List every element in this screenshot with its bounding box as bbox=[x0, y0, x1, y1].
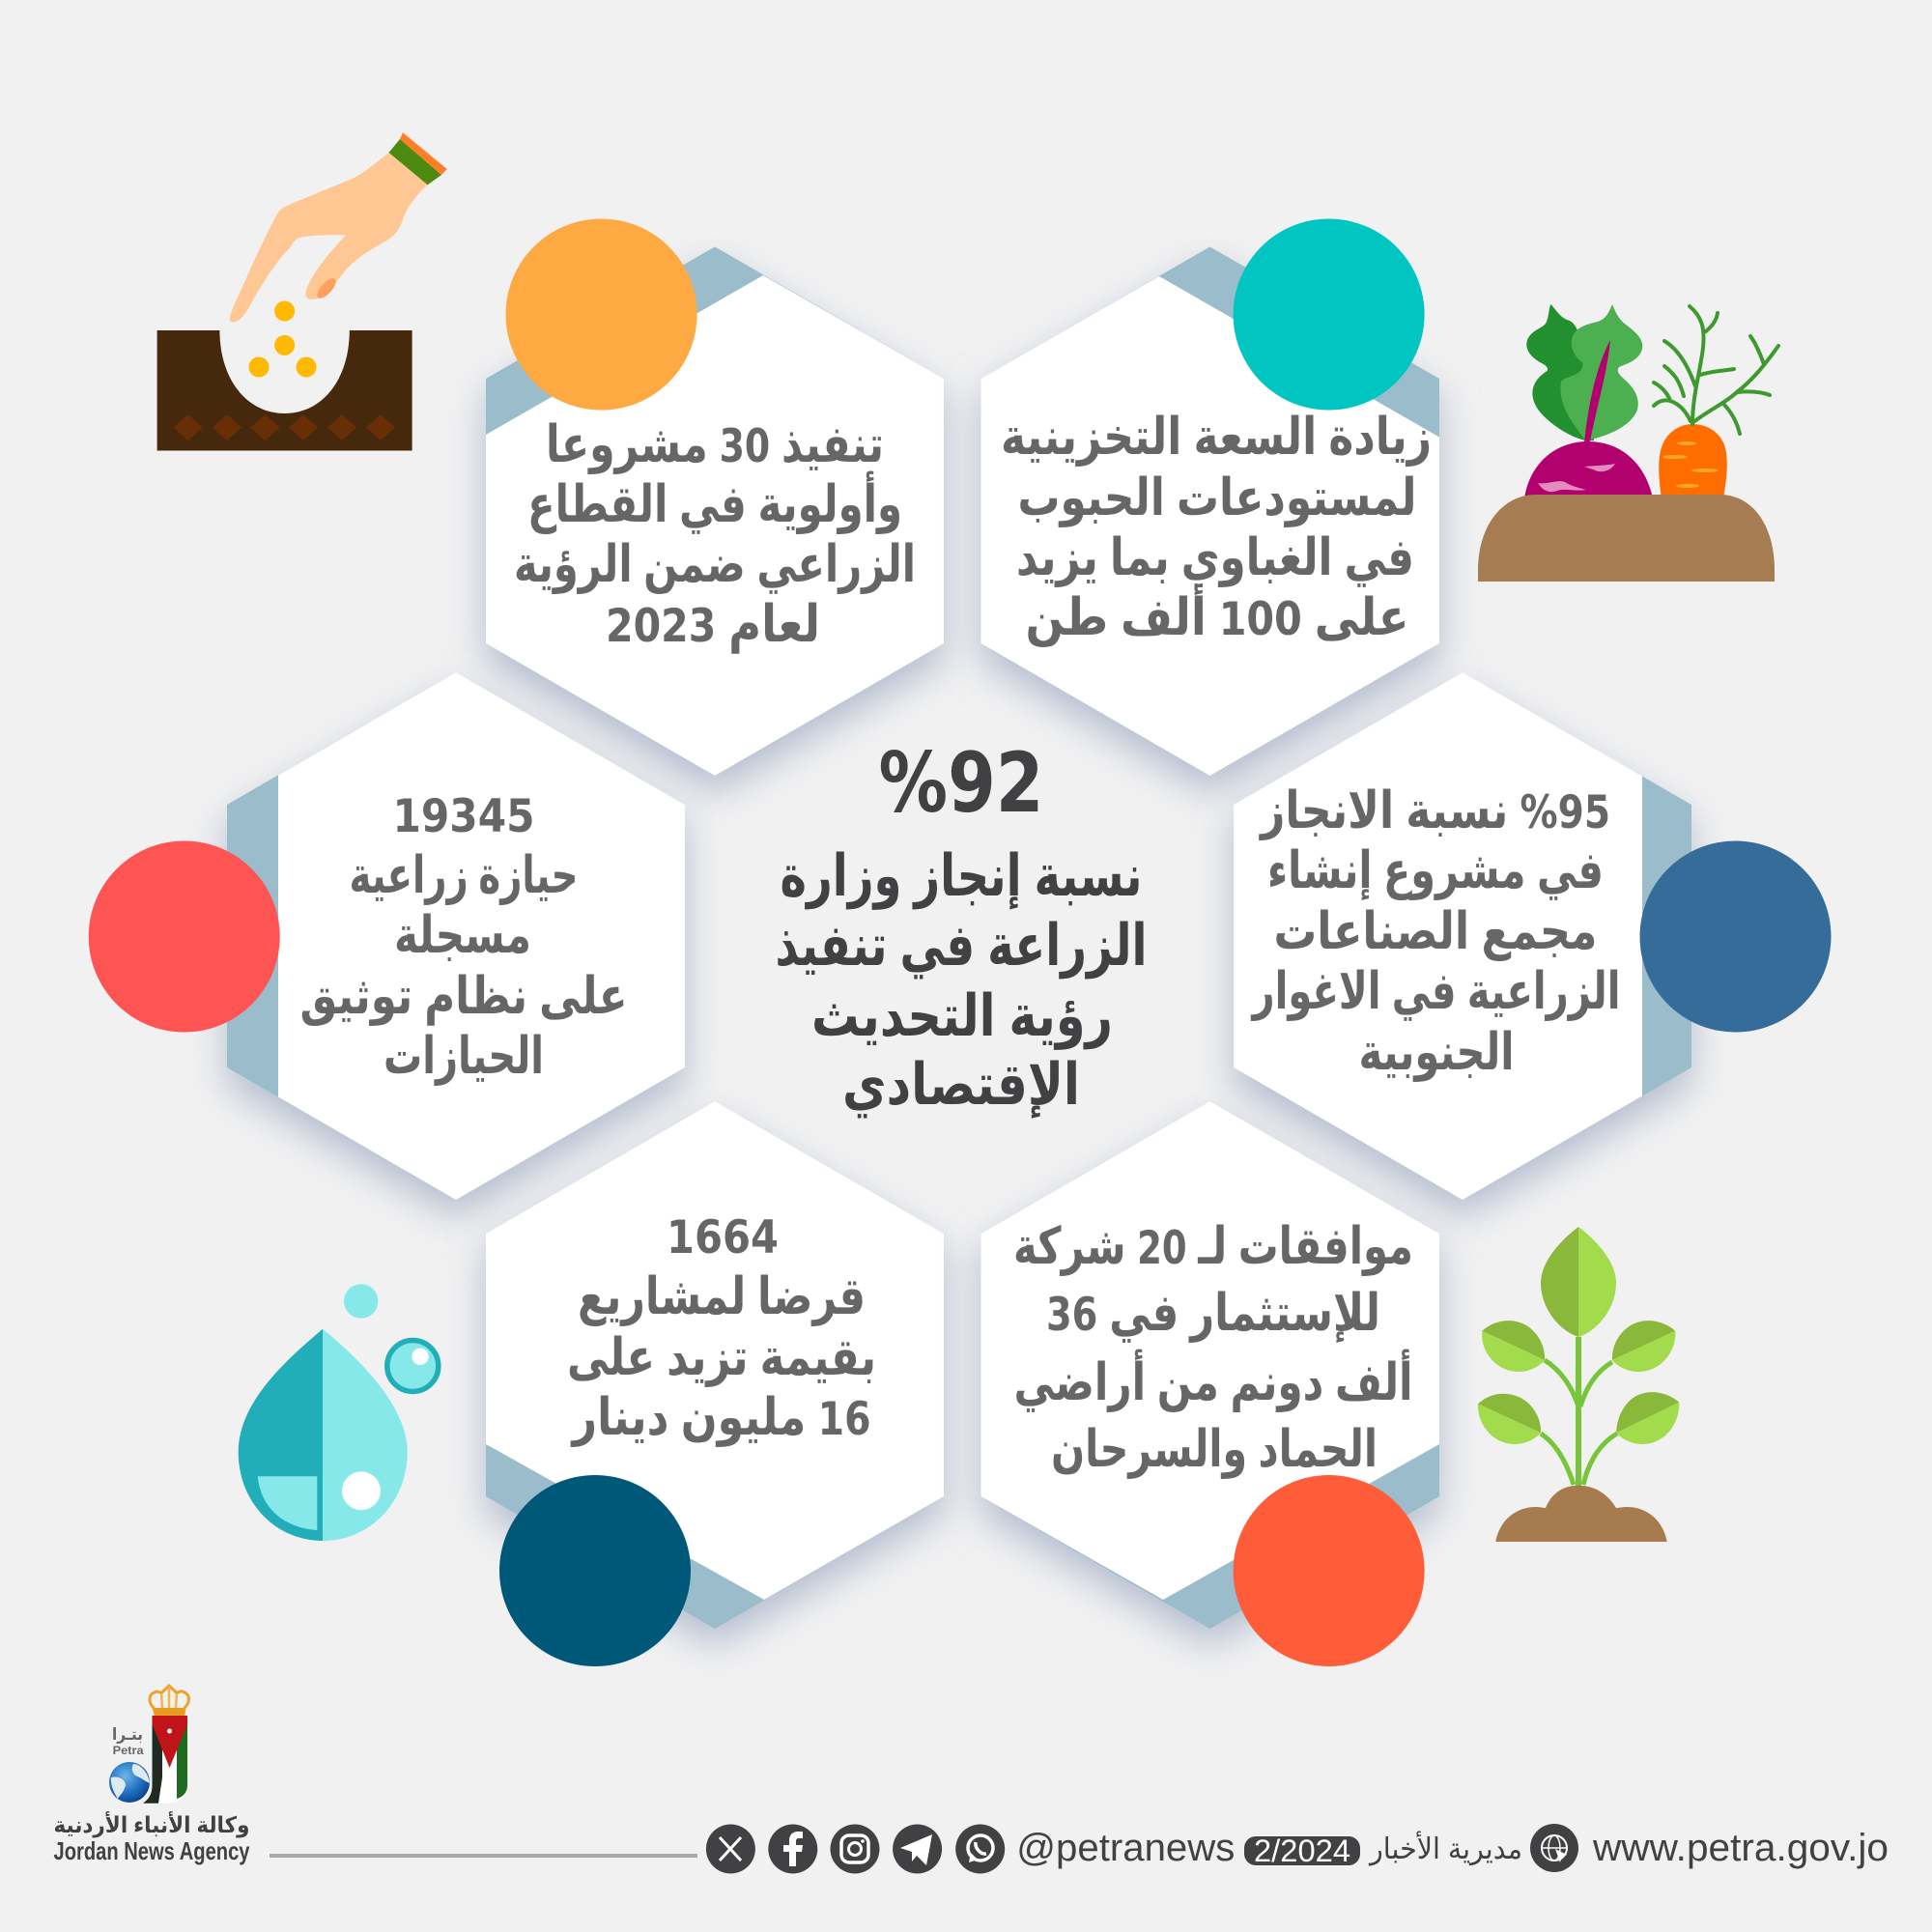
logo: Petra Jordan News Agency: Jordan News Agency bbox=[54, 1836, 250, 1865]
panel: bottom-right hexagon, investment approvals bbox=[981, 1101, 1439, 1666]
logo: Petra Jordan News Agency bbox=[54, 1686, 250, 1865]
teal circle bbox=[1234, 218, 1425, 410]
logo globe bbox=[109, 1762, 150, 1803]
text: industrial complex: الجنوبية bbox=[1358, 1024, 1515, 1082]
text: investment approvals: موافقات لـ 20 شركة bbox=[1013, 1218, 1413, 1276]
text: loans: 16 مليون دينار bbox=[570, 1389, 871, 1447]
center headline: %92 bbox=[879, 735, 1043, 832]
panel: bottom-left hexagon, loans bbox=[486, 1101, 944, 1666]
text: grain storage: زيادة السعة التخزينية bbox=[1001, 409, 1432, 467]
text: loans: قرضا لمشاريع bbox=[578, 1268, 866, 1326]
date badge: 2/2024 bbox=[1254, 1833, 1350, 1868]
center headline bbox=[775, 735, 1148, 1119]
news directorate label: مديرية الأخبار bbox=[1368, 1830, 1522, 1865]
icon: Instagram bbox=[831, 1824, 879, 1874]
logo crown bbox=[150, 1686, 189, 1715]
text: 30 projects: الزراعي ضمن الرؤية bbox=[514, 536, 916, 594]
text: land holdings: مسجلة bbox=[394, 907, 531, 964]
center headline: الزراعة في تنفيذ bbox=[775, 913, 1148, 980]
logo: Petra Jordan News Agency: بتـرا bbox=[112, 1725, 143, 1745]
orange circle bbox=[506, 218, 697, 410]
icon: Telegram bbox=[893, 1824, 942, 1874]
text: industrial complex: مجمع الصناعات bbox=[1273, 903, 1598, 961]
center headline: الإقتصادي bbox=[842, 1052, 1080, 1119]
text: land holdings bbox=[299, 790, 628, 1086]
panel: top-left hexagon, 30 projects bbox=[486, 218, 944, 776]
icon: website globe bbox=[1530, 1824, 1578, 1872]
panel: top-right hexagon, grain storage bbox=[981, 218, 1439, 776]
text: investment approvals: للإستثمار في 36 bbox=[1046, 1285, 1380, 1343]
text: loans: بقيمة تزيد على bbox=[567, 1329, 876, 1387]
orange-red circle bbox=[1234, 1475, 1425, 1666]
logo: Petra Jordan News Agency: Petra bbox=[113, 1744, 144, 1757]
text: industrial complex bbox=[1250, 782, 1621, 1082]
text: loans: 1664 bbox=[667, 1211, 779, 1264]
icon: sprout plant bbox=[1478, 1227, 1679, 1542]
text: land holdings: على نظام توثيق bbox=[299, 968, 628, 1026]
panel: middle-right hexagon, industrial complex bbox=[1234, 672, 1832, 1200]
text: grain storage: في الغباوي بما يزيد bbox=[1016, 529, 1414, 587]
text: land holdings: 19345 bbox=[392, 790, 535, 843]
icon: beet and carrot bbox=[1478, 304, 1778, 582]
footer divider line bbox=[270, 1854, 697, 1858]
text: 30 projects bbox=[514, 416, 916, 654]
icon: hand planting seeds bbox=[157, 132, 447, 451]
text: loans bbox=[567, 1211, 876, 1447]
text: 30 projects: تنفيذ 30 مشروعا bbox=[546, 416, 884, 474]
website url: www.petra.gov.jo bbox=[1592, 1827, 1889, 1869]
panel: middle-left hexagon, land holdings bbox=[89, 672, 685, 1200]
text: grain storage: لمستودعات الحبوب bbox=[1018, 469, 1416, 527]
logo flag bbox=[143, 1716, 187, 1804]
center headline: نسبة إنجاز وزارة bbox=[781, 843, 1142, 910]
icon: Facebook bbox=[768, 1824, 817, 1874]
text: investment approvals: ألف دونم من أراضي bbox=[1014, 1349, 1412, 1412]
logo: Petra Jordan News Agency: وكالة الأنباء الأردنية bbox=[54, 1810, 249, 1838]
center headline: رؤية التحديث bbox=[811, 983, 1113, 1050]
text: grain storage bbox=[1001, 409, 1432, 647]
text: investment approvals bbox=[1013, 1218, 1413, 1479]
text: grain storage: على 100 ألف طن bbox=[1026, 583, 1408, 647]
icon: water drop bbox=[239, 1284, 439, 1541]
text: 30 projects: وأولوية في القطاع bbox=[527, 470, 902, 534]
social handle: @petranews bbox=[1016, 1827, 1235, 1869]
blue circle bbox=[1640, 840, 1832, 1032]
icon: X social bbox=[706, 1824, 755, 1874]
text: investment approvals: الحماد والسرحان bbox=[1051, 1421, 1378, 1479]
navy circle bbox=[499, 1475, 691, 1666]
text: land holdings: الحيازات bbox=[384, 1028, 544, 1086]
text: land holdings: حيازة زراعية bbox=[350, 847, 578, 905]
red circle bbox=[89, 840, 280, 1032]
text: industrial complex: %95 نسبة الانجاز bbox=[1259, 782, 1610, 840]
text: 30 projects: لعام 2023 bbox=[606, 596, 820, 654]
icon: WhatsApp bbox=[955, 1824, 1005, 1874]
text: industrial complex: الزراعية في الاغوار bbox=[1250, 963, 1621, 1021]
text: industrial complex: في مشروع إنشاء bbox=[1267, 842, 1604, 900]
